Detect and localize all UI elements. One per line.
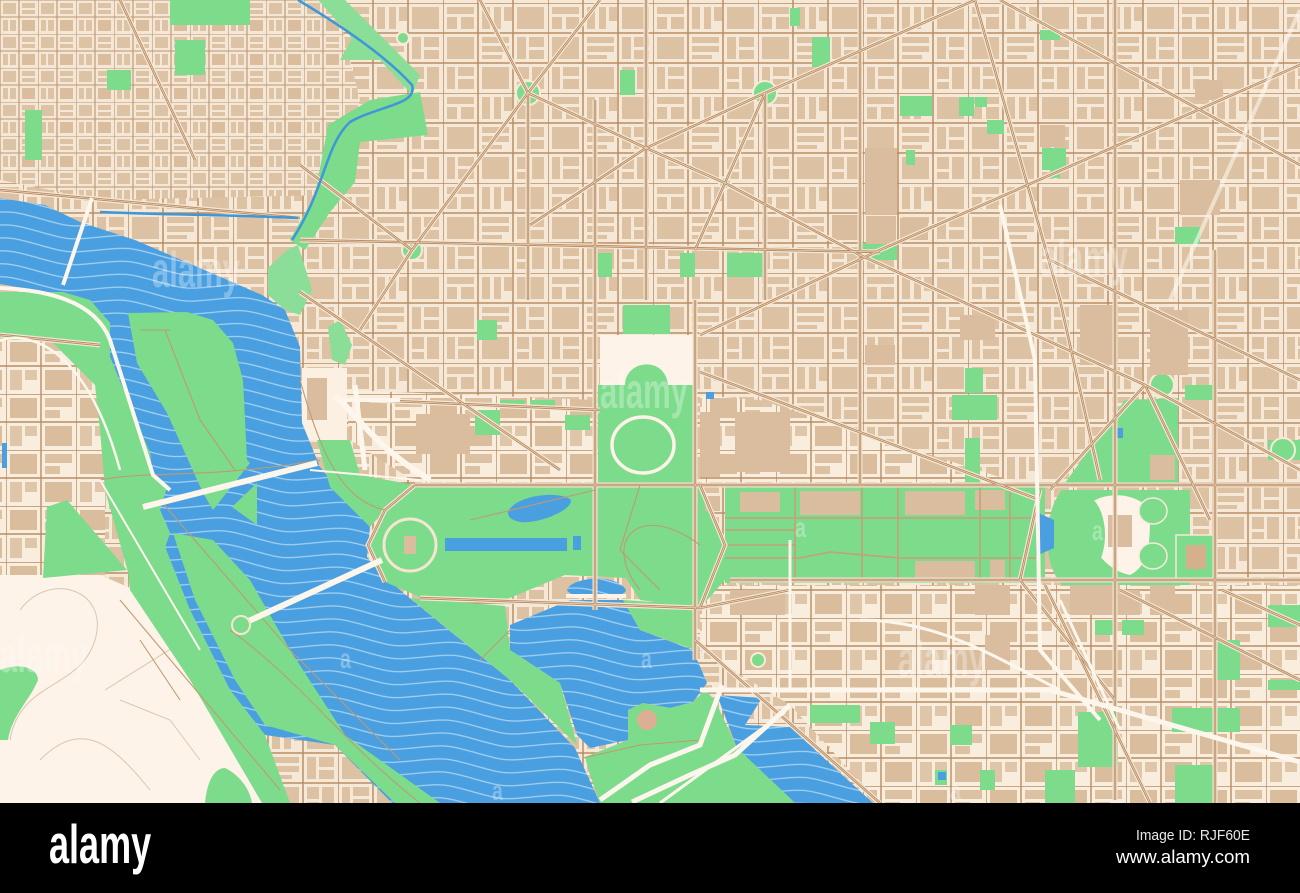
roosevelt island: [128, 312, 250, 510]
faint watermarks: alamy: [1040, 229, 1128, 286]
park drive network: [100, 330, 700, 803]
national mall: [725, 487, 1045, 583]
lincoln memorial: [404, 536, 416, 554]
faint watermarks: a: [492, 776, 503, 807]
traffic circles: [397, 32, 1295, 667]
arlington cemetery land: [0, 575, 285, 803]
constitution gardens lake: [508, 495, 571, 522]
east potomac park: [410, 598, 577, 745]
stanton park northeast green: [1065, 398, 1178, 485]
reflecting pool: [445, 538, 567, 551]
capitol ovals and library park: [1139, 498, 1214, 579]
rosslyn street grid: [0, 335, 105, 575]
western riverbank park: [0, 292, 290, 803]
arlington south park: [205, 768, 252, 803]
faint watermarks: a: [641, 644, 652, 675]
rock creek north park: [318, 0, 420, 95]
capitol building: [1108, 515, 1132, 547]
riverfront park strip: [268, 245, 312, 315]
ellipse park: [598, 385, 696, 485]
lincoln memorial circle: [384, 519, 436, 571]
potomac river: [0, 198, 600, 803]
capitol grounds: [1047, 490, 1190, 585]
smithsonian museums on the mall: [705, 490, 1005, 579]
white house grounds: [600, 335, 695, 385]
arlington west park: [0, 666, 38, 740]
lafayette square: [623, 305, 670, 334]
kennedy center small greens: [328, 320, 352, 365]
faint watermarks: alamy: [600, 362, 688, 419]
arlington paths: [10, 589, 200, 790]
washington channel: [510, 600, 707, 748]
image id: Image ID: RJF60E: [1136, 827, 1250, 844]
faint watermarks: a: [795, 513, 806, 544]
capitol west lawn: [1061, 495, 1105, 575]
southwest large buildings: [700, 585, 1300, 803]
small ponds: [2, 392, 1123, 780]
lower channel water: [717, 695, 873, 803]
foggy bottom large buildings: [345, 390, 595, 485]
ellipse lawn: [612, 417, 674, 473]
alamy logo: alamy: [49, 813, 151, 875]
faint watermarks: alamy: [898, 630, 986, 687]
pentagon side park: [43, 500, 127, 578]
capitol building grounds: [1085, 495, 1150, 575]
faint watermarks: alamy: [152, 241, 240, 298]
faint watermarks: a: [340, 644, 351, 675]
rock creek park: [290, 92, 428, 250]
large tan buildings: [307, 80, 1223, 670]
tidal basin bridge: [566, 594, 626, 598]
west mall extension: [317, 440, 415, 527]
faint watermarks: a: [950, 776, 961, 807]
pentagon road land patch: [302, 368, 347, 440]
library building: [1186, 545, 1206, 569]
rock creek and c&o canal: [100, 0, 413, 240]
federal triangle large buildings: [700, 395, 1040, 490]
white house lawn: [625, 364, 668, 385]
website: www.alamy.com: [1115, 847, 1250, 867]
west potomac and mall park: [368, 485, 725, 608]
jefferson memorial: [637, 710, 657, 730]
capitol reflecting pool: [1036, 512, 1054, 556]
jefferson north park: [623, 600, 695, 650]
arlington memorial bridge deck: [232, 616, 250, 634]
southern park: [585, 690, 795, 803]
faint watermarks: a: [1092, 516, 1103, 547]
faint watermarks: alamy: [0, 626, 88, 683]
mall inner paths: [725, 487, 1040, 583]
faint watermarks: [0, 229, 1128, 807]
footer bar: [0, 803, 1300, 893]
tidal basin: [567, 579, 626, 598]
georgetown fine street grid: [0, 0, 360, 200]
columbia island: [173, 533, 440, 803]
small island: [232, 483, 257, 525]
